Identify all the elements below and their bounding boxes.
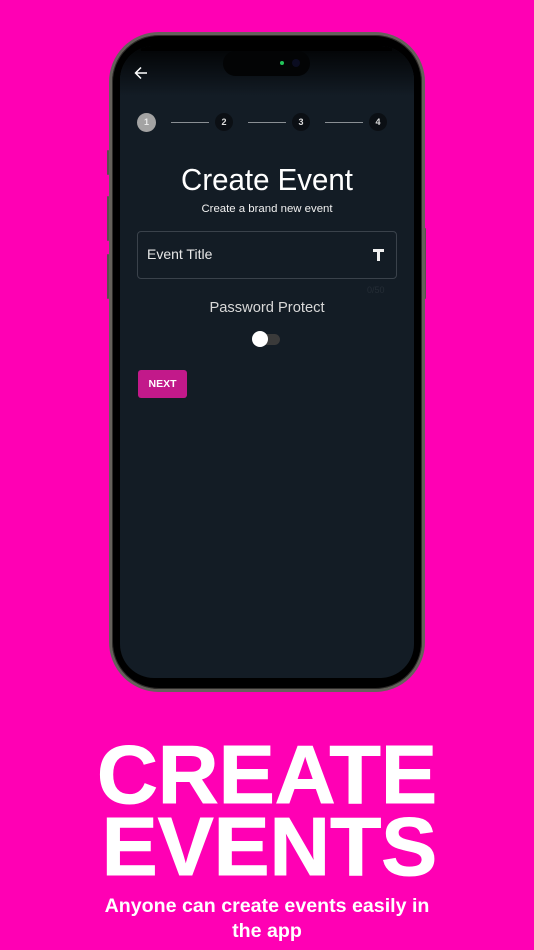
next button <box>138 370 187 398</box>
screen subtitle: Create a brand new event <box>201 203 333 215</box>
phone mockup <box>107 32 426 692</box>
event title input <box>137 231 397 279</box>
phone body <box>108 32 424 692</box>
stepper: 1 <box>144 116 149 126</box>
headline <box>97 728 437 892</box>
stepper: 2 <box>221 116 226 126</box>
toggle switch <box>252 331 280 347</box>
input label: Event Title <box>147 246 212 262</box>
stepper <box>137 113 387 132</box>
subheading: the app <box>232 921 302 942</box>
password protect label: Password Protect <box>209 300 325 316</box>
icon: T <box>373 249 384 261</box>
stepper: 3 <box>298 116 304 126</box>
screen title: Create Event <box>181 162 353 197</box>
dynamic island <box>223 51 310 76</box>
subheading: Anyone can create events easily in <box>105 896 429 917</box>
character counter: 0/50 <box>367 285 385 295</box>
side buttons <box>107 150 426 299</box>
stepper: 4 <box>375 116 380 126</box>
headline: EVENTS <box>102 800 437 892</box>
headline: CREATE <box>97 728 437 820</box>
next button: NEXT <box>148 378 176 390</box>
subheading <box>105 896 429 942</box>
screen <box>120 46 414 678</box>
icon: back arrow <box>134 67 147 79</box>
